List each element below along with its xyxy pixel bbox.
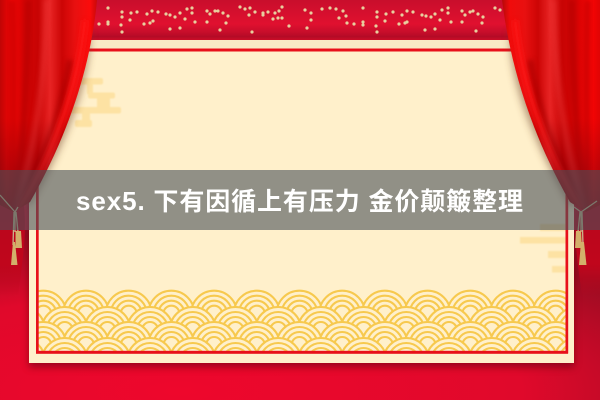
right tassel — [574, 201, 597, 265]
left curtain — [0, 0, 97, 272]
wave row 3 — [38, 321, 566, 346]
left tassel — [0, 195, 22, 265]
title: sex5. 下有因循上有压力 金价颠簸整理 — [76, 186, 524, 216]
red inner border — [36, 48, 568, 354]
gold confetti dots — [99, 7, 500, 32]
wave scale pattern — [38, 290, 566, 351]
wave row 1 — [38, 290, 566, 312]
wave row 4 — [38, 337, 566, 351]
translucent title band — [0, 170, 600, 230]
cloud motif: right — [520, 224, 566, 272]
right curtain — [500, 0, 600, 296]
cloud motif: left — [68, 78, 121, 127]
paper card — [29, 40, 574, 367]
curtain shadows — [24, 30, 578, 205]
wave row 2 — [38, 306, 566, 330]
